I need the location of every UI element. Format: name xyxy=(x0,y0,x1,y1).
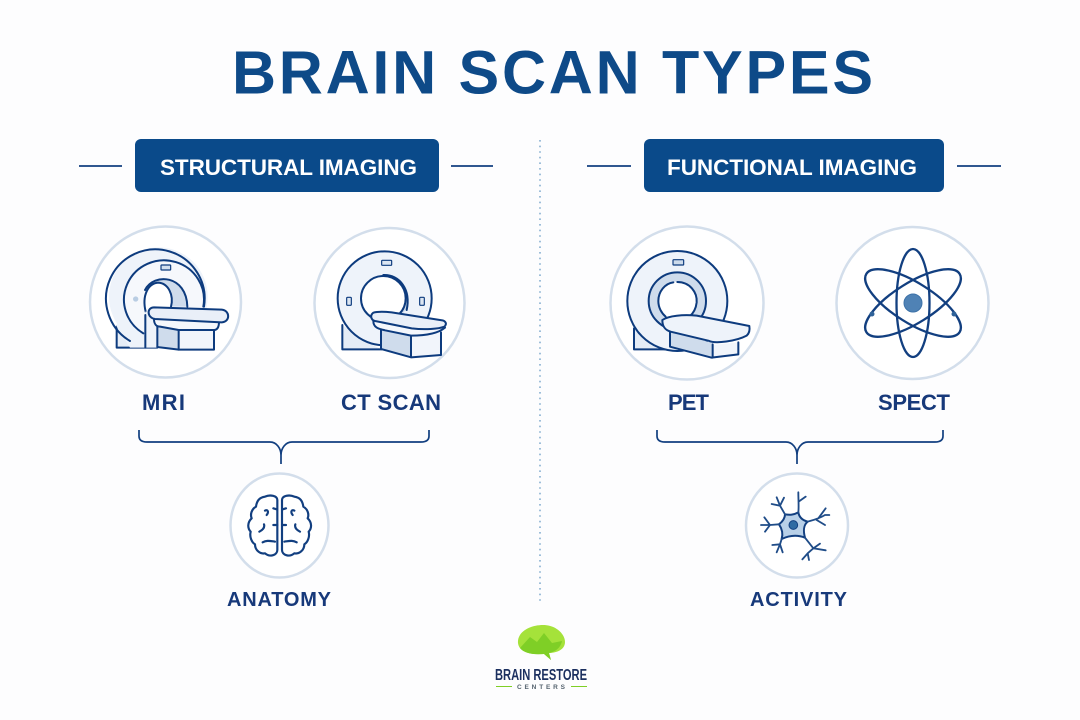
label: SPECT: SPECT xyxy=(878,390,951,415)
label: PET: PET xyxy=(668,390,710,415)
icon: PET scanner xyxy=(610,226,764,380)
logo: Brain Restore Centers: BRAIN RESTORE xyxy=(495,667,587,684)
heading: structural imaging xyxy=(79,139,493,192)
label: activity: ACTIVITY xyxy=(750,589,848,611)
label: anatomy: ANATOMY xyxy=(227,589,332,611)
bracket: structural xyxy=(139,430,429,464)
icon: MRI scanner xyxy=(90,226,241,378)
icon: SPECT atom xyxy=(836,227,988,379)
icon: neuron xyxy=(746,474,848,578)
title: BRAIN SCAN TYPES xyxy=(232,38,873,106)
icon: green brain xyxy=(518,625,565,660)
icon: brain xyxy=(230,474,328,578)
logo: Brain Restore Centers xyxy=(495,625,587,691)
heading: structural imaging: STRUCTURAL IMAGING xyxy=(160,155,417,180)
label: CT scan: CT SCAN xyxy=(341,390,441,415)
bracket: functional xyxy=(657,430,943,464)
icon: CT scanner xyxy=(314,228,464,378)
heading: functional imaging: FUNCTIONAL IMAGING xyxy=(667,155,917,180)
heading: functional imaging xyxy=(587,139,1001,192)
label: MRI: MRI xyxy=(142,390,185,415)
logo: Brain Restore Centers: CENTERS xyxy=(517,684,566,691)
